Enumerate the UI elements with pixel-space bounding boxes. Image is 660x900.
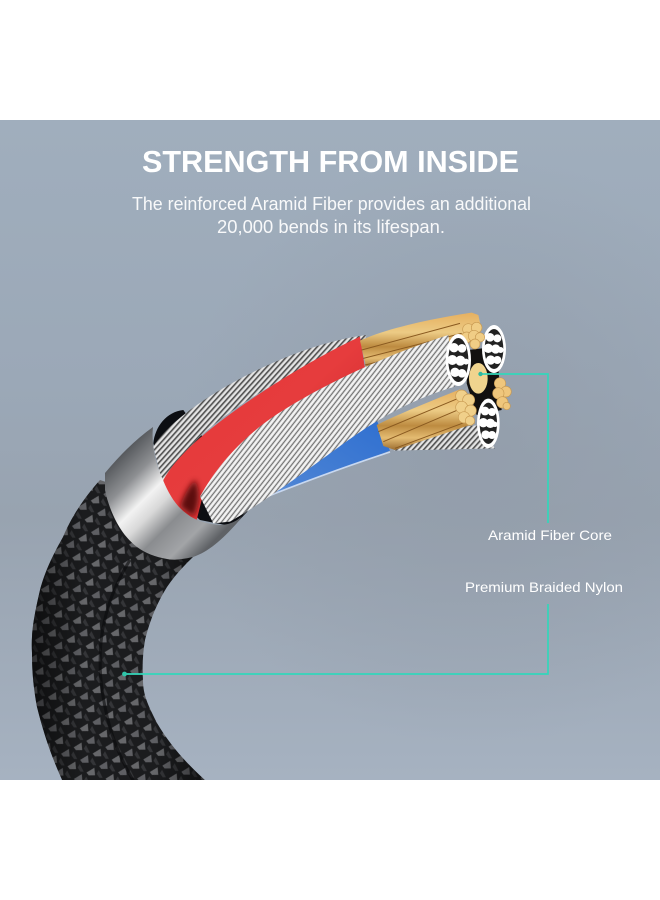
blue insulated wire [247, 420, 390, 507]
title: STRENGTH FROM INSIDE [142, 144, 519, 179]
aramid fiber core end [469, 363, 488, 394]
red wire inner shadow [180, 480, 199, 517]
subtitle text: 20,000 bends in its lifespan. [217, 217, 445, 237]
lower copper bundle end [456, 390, 476, 425]
metal ferrule [105, 427, 253, 560]
central silver braid wire [200, 335, 455, 523]
white top band [0, 0, 660, 120]
top right silver conductor end [482, 325, 506, 373]
leader line: braided nylon [122, 604, 548, 676]
blue wire highlight [252, 452, 390, 503]
lower copper strands [377, 389, 475, 450]
right copper bundle end [493, 378, 511, 410]
subtitle text: The reinforced Aramid Fiber provides an additional [132, 194, 531, 214]
upper copper strands [360, 313, 482, 369]
upper silver braid wire [153, 335, 367, 487]
subtitle text [132, 194, 531, 237]
label: premium braided nylon: Premium Braided Nylon [465, 579, 623, 595]
top copper bundle end [461, 322, 485, 349]
slate background panel [0, 120, 660, 780]
braided nylon cable body [32, 480, 207, 782]
red insulated wire [163, 337, 365, 520]
black core gap [467, 347, 502, 415]
front silver conductor end [446, 334, 471, 386]
leader line: aramid fiber core [478, 372, 548, 523]
white bottom band [0, 780, 660, 900]
lower silver wire [393, 425, 495, 451]
ferrule opening [153, 410, 255, 527]
lower silver conductor end [477, 399, 500, 448]
infographic canvas [0, 120, 660, 780]
exposed wires, drawn in zoomed coordinates [153, 313, 511, 527]
label: aramid fiber core: Aramid Fiber Core [488, 527, 612, 543]
